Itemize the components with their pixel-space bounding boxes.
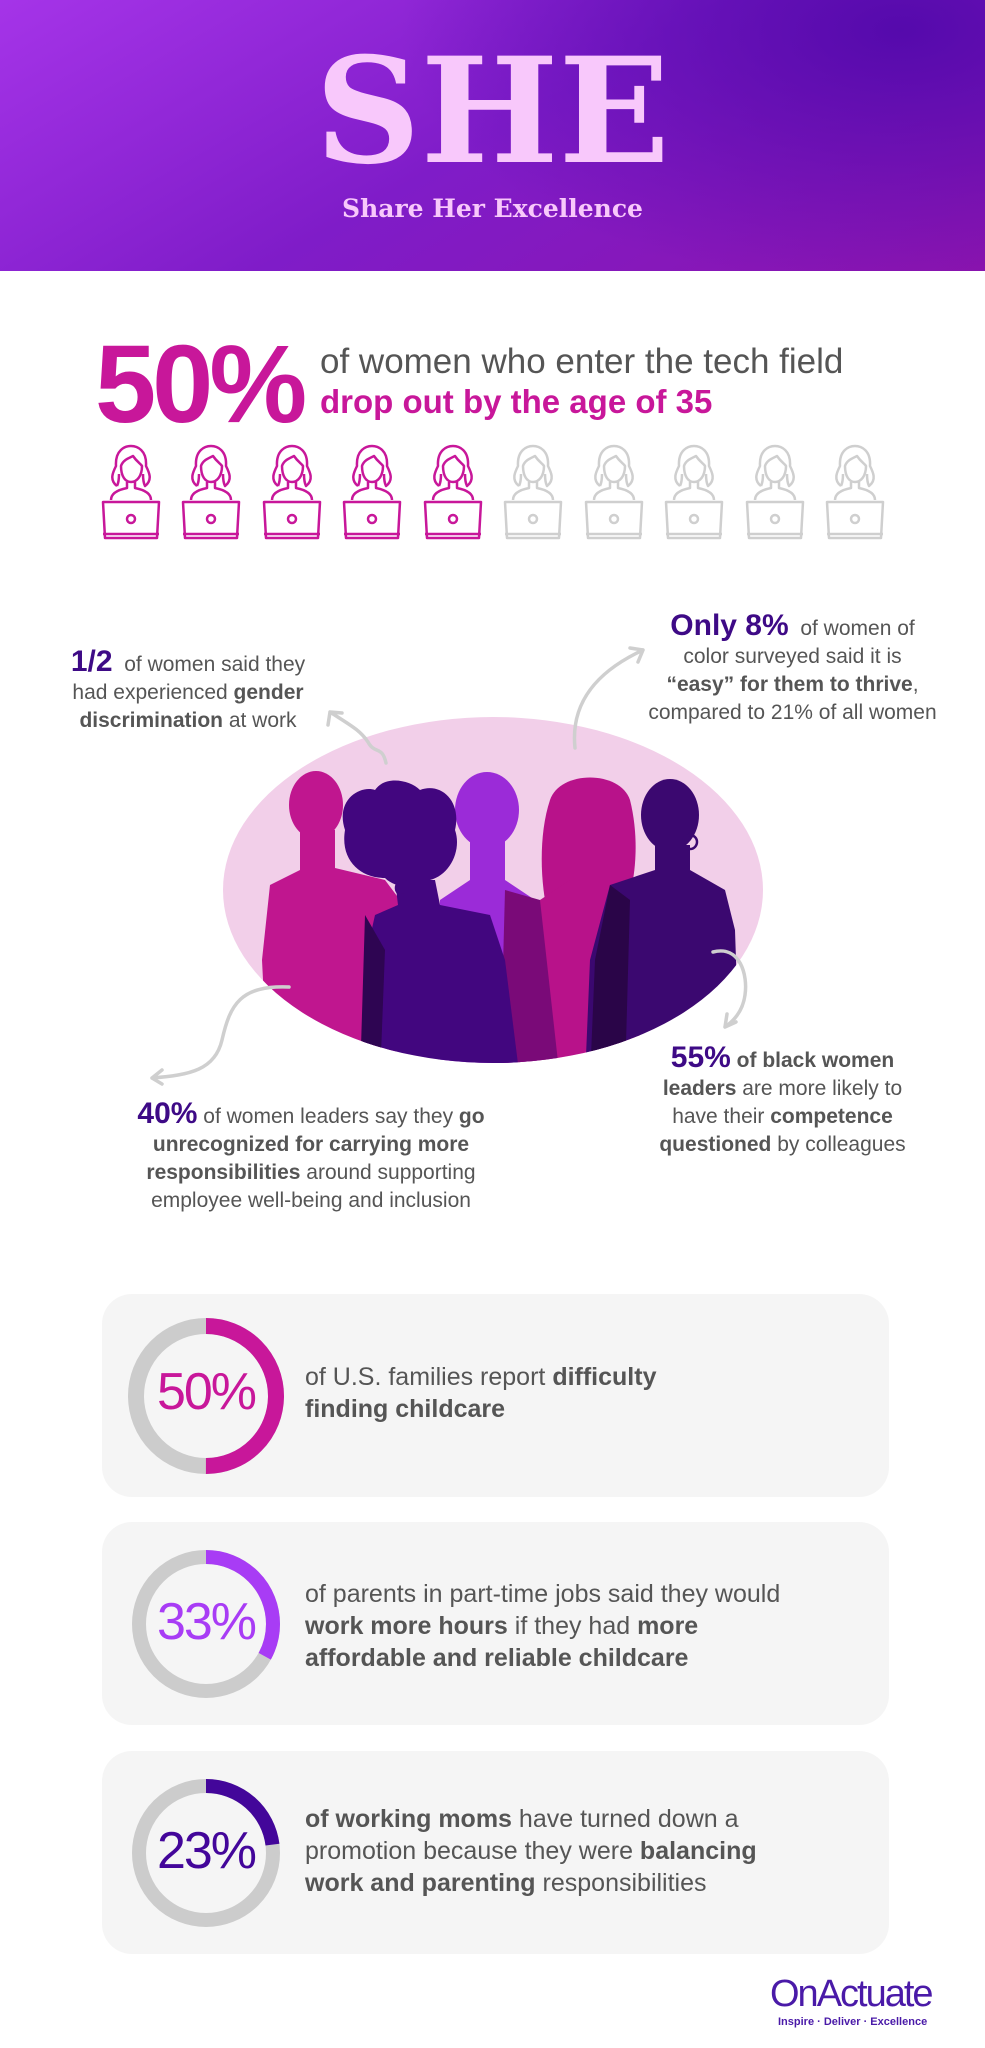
card text: of U.S. families report difficulty <box>305 1363 656 1391</box>
percent label: 50% <box>157 1363 255 1421</box>
arrow: to 1/2 stat <box>328 712 386 763</box>
percent label: 23% <box>157 1822 255 1880</box>
stat text <box>320 342 843 420</box>
donut chart 50% <box>128 1318 284 1474</box>
callout: 1/2 gender discrimination: had experienced gender <box>72 681 304 704</box>
callout: only 8% women of color: Only 8% of women of <box>670 609 915 642</box>
stat text: of women who enter the tech field <box>320 342 843 381</box>
icon: woman 3 <box>264 446 320 538</box>
title: SHE <box>315 26 670 197</box>
card text <box>305 1363 656 1423</box>
card text: work more hours if they had more <box>305 1612 698 1640</box>
callout: 55% black women leaders: questioned by colleagues <box>659 1133 906 1156</box>
arrow: to 40% stat <box>152 987 289 1084</box>
icon: woman 8 <box>666 446 722 538</box>
icon: woman 9 <box>747 446 803 538</box>
callout: 40% women leaders: unrecognized for carrying more <box>153 1133 469 1156</box>
stat text: drop out by the age of 35 <box>320 383 712 420</box>
icon: woman 10 <box>827 446 883 538</box>
card: 33% part-time <box>102 1522 889 1725</box>
pink ellipse background <box>223 717 763 1063</box>
card text: of parents in part-time jobs said they would <box>305 1580 780 1608</box>
card text: of working moms have turned down a <box>305 1805 739 1833</box>
silhouettes <box>262 771 740 1080</box>
callout: 40% women leaders: responsibilities around supporting <box>146 1161 476 1184</box>
percent label: 33% <box>157 1593 255 1651</box>
card text: finding childcare <box>305 1395 505 1423</box>
logo: OnActuate <box>770 1973 932 2028</box>
icon: woman 1 <box>103 446 159 538</box>
arrow: to 8% stat <box>574 648 643 748</box>
callout: 40% women leaders: 40% of women leaders say they go <box>137 1097 485 1130</box>
card: 23% working moms <box>102 1751 889 1954</box>
big number: 50% <box>95 323 303 446</box>
card text <box>305 1580 780 1672</box>
card text <box>305 1805 757 1897</box>
callout: 55% black women leaders <box>659 1041 906 1156</box>
callout: only 8% women of color: compared to 21% of all women <box>648 701 937 724</box>
icon: woman 6 <box>505 446 561 538</box>
illustration: women silhouettes in ellipse with arrows <box>150 646 763 1086</box>
header banner <box>0 0 985 271</box>
callout: 40% women leaders <box>137 1097 485 1212</box>
card: 50% childcare <box>102 1294 889 1497</box>
card text: promotion because they were balancing <box>305 1837 757 1865</box>
callout: 1/2 gender discrimination: discrimination at work <box>79 709 297 732</box>
icon: woman 4 <box>344 446 400 538</box>
donut chart 23% <box>132 1779 280 1927</box>
donut chart 33% <box>132 1550 280 1698</box>
callout: only 8% women of color <box>648 609 937 724</box>
callout: 55% black women leaders: have their competence <box>672 1105 893 1128</box>
big stat: 50% <box>95 323 843 446</box>
callout: 1/2 gender discrimination <box>71 645 305 732</box>
icon: woman 5 <box>425 446 481 538</box>
callout: only 8% women of color: color surveyed said it is <box>683 645 902 668</box>
callout: 55% black women leaders: 55% of black women <box>671 1041 894 1074</box>
icon: woman 7 <box>586 446 642 538</box>
card text: work and parenting responsibilities <box>305 1869 707 1897</box>
callout: only 8% women of color: “easy” for them to thrive, <box>666 673 919 696</box>
card text: affordable and reliable childcare <box>305 1644 688 1672</box>
callout: 55% black women leaders: leaders are more likely to <box>663 1077 902 1100</box>
callout: 40% women leaders: employee well-being and inclusion <box>151 1189 471 1212</box>
callout: 1/2 gender discrimination: 1/2 of women said they <box>71 645 305 678</box>
logo wordmark: OnActuate <box>770 1973 932 2015</box>
icon row: women at laptops <box>102 444 884 540</box>
icon: woman 2 <box>183 446 239 538</box>
subtitle: Share Her Excellence <box>342 194 643 223</box>
logo tagline: Inspire · Deliver · Excellence <box>778 2016 927 2028</box>
arrow: to 55% stat <box>713 951 746 1027</box>
